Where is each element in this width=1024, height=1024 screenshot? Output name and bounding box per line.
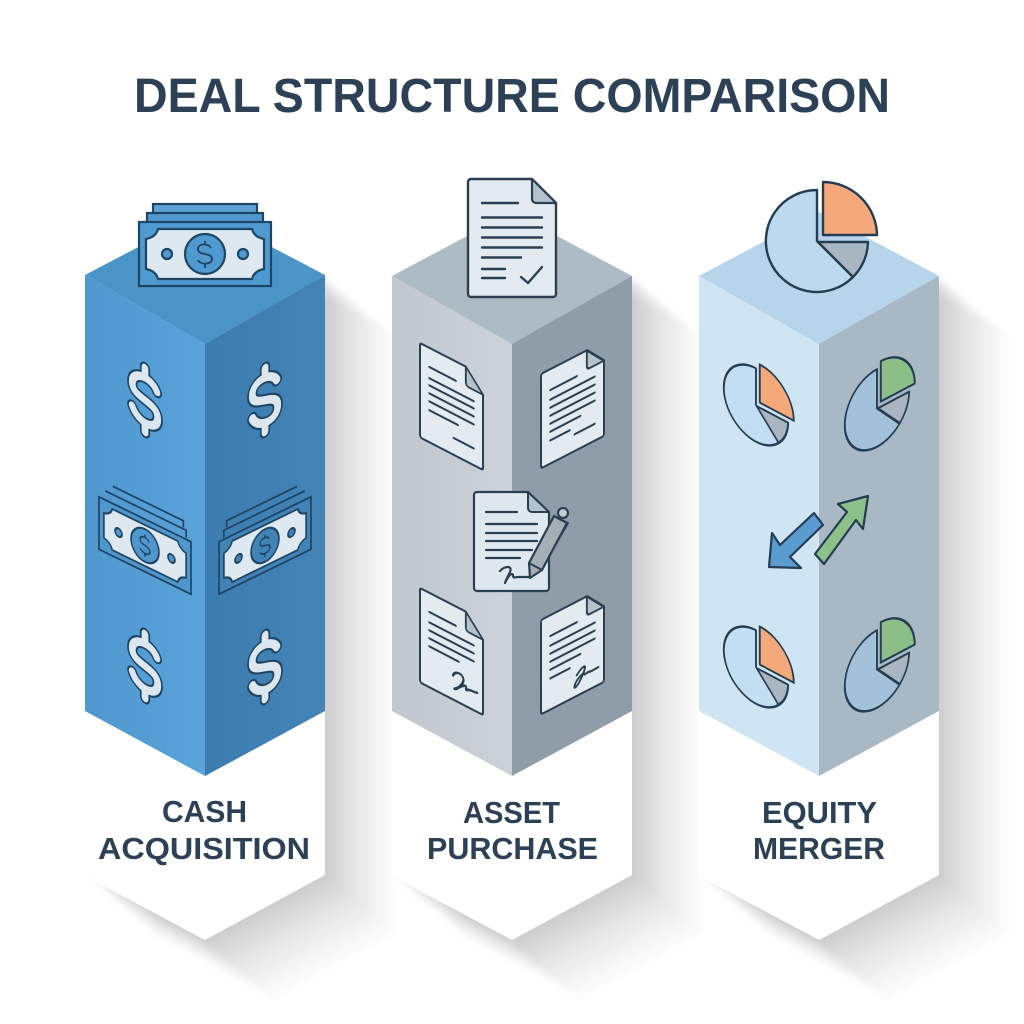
block left face xyxy=(392,276,512,776)
icon: banknote stack on top xyxy=(139,204,271,286)
icon: pie chart right face lower xyxy=(845,604,915,725)
label: cash acquisition: CASH xyxy=(162,794,247,829)
label: equity merger xyxy=(753,795,885,866)
icon: pie chart left face lower xyxy=(724,607,794,724)
label: asset purchase: PURCHASE xyxy=(427,831,598,866)
icon: dollar left lower xyxy=(132,628,158,704)
block left face xyxy=(85,275,205,776)
block top face xyxy=(699,212,939,344)
white label panel xyxy=(392,700,632,940)
block left face xyxy=(699,276,819,776)
block top face xyxy=(392,212,632,344)
column shadows xyxy=(89,215,1007,998)
label: asset purchase xyxy=(427,795,598,866)
block right face xyxy=(819,276,939,776)
icon: pie chart on top xyxy=(766,182,877,292)
icon: banknote on right face xyxy=(219,480,311,594)
block right face xyxy=(512,276,632,776)
arrow: green up-right xyxy=(815,496,868,564)
block top face xyxy=(85,212,325,344)
white label panel xyxy=(699,700,939,940)
title: DEAL STRUCTURE COMPARISON xyxy=(134,70,890,123)
label: equity merger: MERGER xyxy=(753,831,885,866)
icon: dollar right lower xyxy=(252,629,278,705)
icon: document with check on top xyxy=(468,179,556,297)
white label panel xyxy=(85,700,325,940)
icon: banknote on left face xyxy=(99,480,191,594)
icon: pen xyxy=(529,508,568,578)
column: asset purchase xyxy=(392,179,632,940)
label: asset purchase: ASSET xyxy=(463,795,560,830)
icon: dollar right upper xyxy=(252,362,278,438)
icon: document on left face upper xyxy=(420,343,483,470)
icon: pie chart left face upper xyxy=(724,345,794,462)
icon: dollar left upper xyxy=(132,362,158,438)
icon: document with pen in centre xyxy=(474,492,568,591)
label: equity merger: EQUITY xyxy=(762,795,877,830)
block right face xyxy=(205,275,325,776)
label: cash acquisition xyxy=(98,794,310,866)
icon: pie chart right face upper xyxy=(845,343,915,464)
label: cash acquisition: ACQUISITION xyxy=(98,831,310,866)
icon: signed document on left face lower xyxy=(420,588,483,715)
arrow: blue down-left xyxy=(769,513,823,568)
column: cash acquisition xyxy=(85,204,325,940)
icon: document on right face upper xyxy=(541,341,604,468)
icon: signed document on right face lower xyxy=(541,587,604,714)
column: equity merger xyxy=(699,182,939,940)
